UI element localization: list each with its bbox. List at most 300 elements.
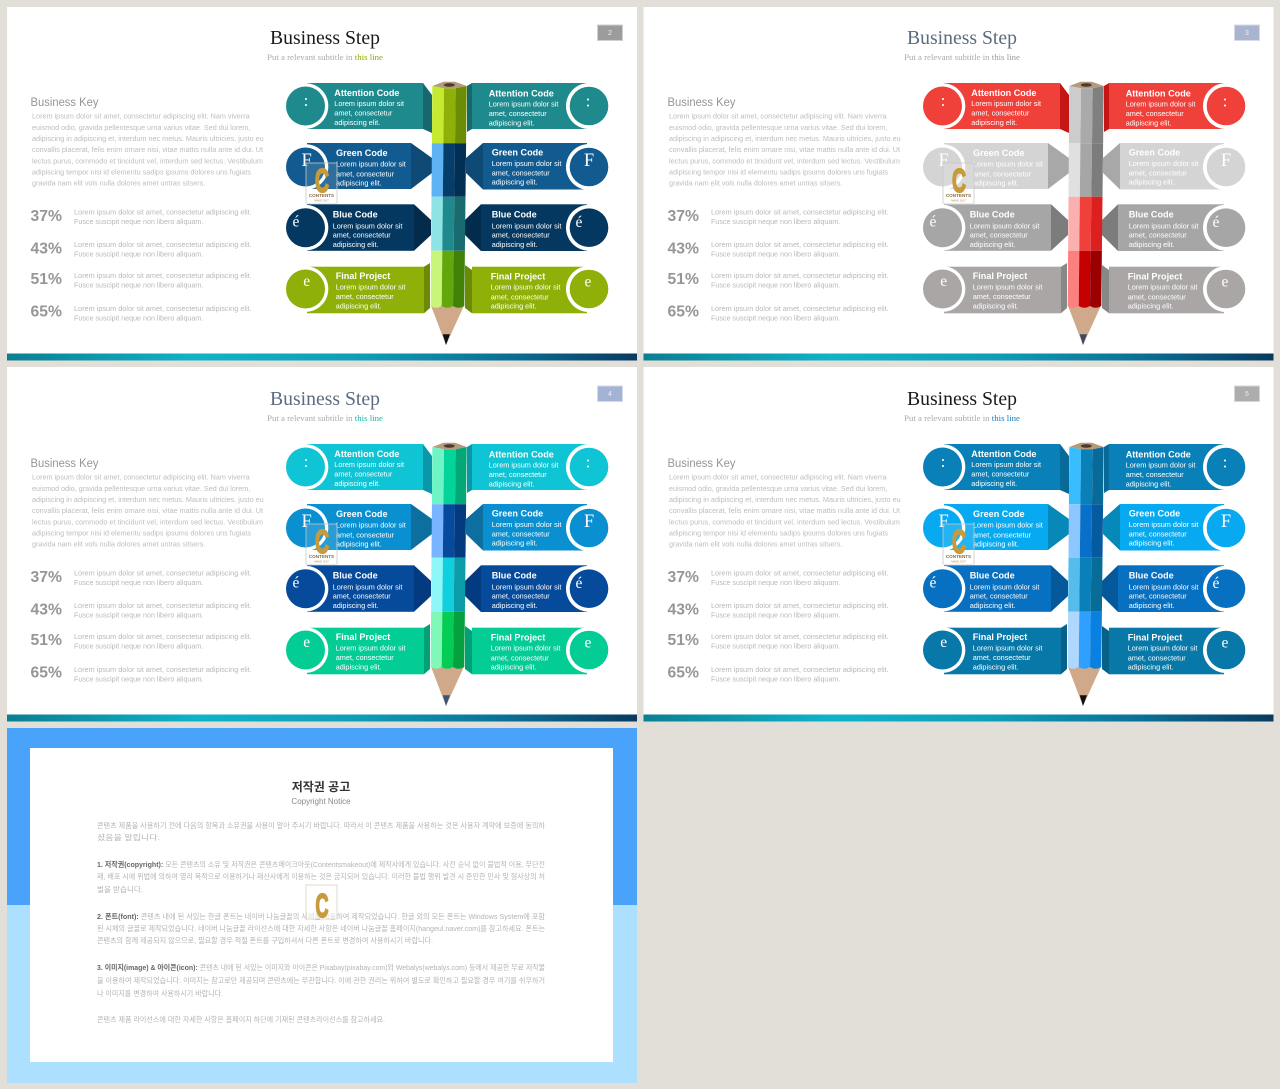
text block: Business Key: gravida nam elit vols nulla dolores amet untras sitsers. <box>32 180 205 187</box>
tab: Final Project right: Final Project <box>1128 271 1182 281</box>
tab: Blue Code right: é <box>576 214 583 231</box>
tab: Final Project left: Lorem ipsum dolor sit <box>973 282 1042 291</box>
tab: Final Project left: Final Project <box>336 632 390 642</box>
stats list: Fusce suscipit neque non libero aliquam. <box>711 219 840 226</box>
tab: Green Code right: F <box>584 151 594 171</box>
text block: Business Key: Lorem ipsum dolor sit amet, consectetur adipiscing elit. Nam viverra <box>669 114 887 121</box>
tab: Green Code left <box>920 504 1069 551</box>
tab: Green Code left: adipiscing elit. <box>973 179 1019 188</box>
tab: Final Project right <box>1102 265 1249 313</box>
text block: section 1: 벌을 받습니다. <box>97 885 143 894</box>
tab: Attention Code left: amet, consectetur <box>334 109 393 118</box>
tab: Blue Code left <box>283 204 431 251</box>
text block: section 2: 콘텐츠의 함께 제공되지 않으므로, 필요할 경우 적절 폰트를 구입하셔서 다른 폰트로 변경하여 사용하시기 바랍니다. <box>97 936 433 945</box>
tab: Blue Code right <box>465 565 612 612</box>
text block: Business Key: convallis placerat, felis enim ornare nisi, vitae mattis nulla ante id dui. Ut <box>32 147 263 154</box>
tab: Final Project left <box>920 624 1067 674</box>
tab: Final Project right: amet, consectetur <box>491 292 549 301</box>
tab: Final Project right: amet, consectetur <box>1128 653 1186 662</box>
tab: Green Code left: adipiscing elit. <box>973 540 1019 549</box>
tab: Attention Code right <box>467 83 612 132</box>
tab: Green Code right: Green Code <box>492 508 543 518</box>
stats list: Fusce suscipit neque non libero aliquam. <box>711 580 840 587</box>
tab: Final Project right: adipiscing elit. <box>1128 663 1174 672</box>
tab: Attention Code left: : <box>304 91 308 110</box>
text block: Business Key: adipiscing tempor nisi id elementu sadips ipsums dolores uns fugiats <box>32 530 252 537</box>
tab: Blue Code right: é <box>576 575 583 592</box>
tab: Blue Code right: Blue Code <box>492 571 537 581</box>
tab: Final Project right: adipiscing elit. <box>1128 302 1174 311</box>
tab: Blue Code right: amet, consectetur <box>492 592 550 601</box>
tab: Attention Code right: Attention Code <box>1126 89 1191 99</box>
stats list: 37% <box>30 208 62 225</box>
page number: 5 <box>1245 391 1249 398</box>
tab: Green Code left: adipiscing elit. <box>336 540 382 549</box>
stats list <box>30 208 252 322</box>
subtitle: Put a relevant subtitle in this line <box>904 413 1020 423</box>
stats list: Lorem ipsum dolor sit amet, consectetur adipiscing elit. <box>74 570 252 577</box>
tab: Blue Code left: é <box>930 214 937 231</box>
stats list: 37% <box>30 569 62 586</box>
stats list: Lorem ipsum dolor sit amet, consectetur adipiscing elit. <box>711 242 889 249</box>
stats list: 65% <box>30 304 62 321</box>
text block: intro: 콘텐츠 제품을 사용하기 전에 다음의 항목과 소유권을 사용이 알아 주시기 바랍니다. 따라서 이 콘텐츠 제품을 사용하는 것은 사용자 계약에 보증에 동의하 <box>97 821 545 830</box>
stats list <box>668 208 889 322</box>
tab: Green Code right: Lorem ipsum dolor sit <box>1129 159 1198 168</box>
stats list: Lorem ipsum dolor sit amet, consectetur adipiscing elit. <box>74 273 252 280</box>
tab: Final Project left: Final Project <box>336 271 390 281</box>
text block: Business Key: euismod odio, gravida pellentesque urna varius vitae. Sed dui lorem, <box>669 125 887 132</box>
tab: Blue Code left: amet, consectetur <box>970 231 1028 240</box>
text block: Business Key: adipiscing in adipiscing et, interdum nec metus. Mauris ultricies, justo eu <box>669 136 901 143</box>
tab: Blue Code left: adipiscing elit. <box>970 601 1016 610</box>
text block: Business Key: Business Key <box>30 97 99 109</box>
heading: copyright notice: 저작권 공고 <box>292 779 350 794</box>
text block: Business Key: lectus purus, commodo et tincidunt vel, interdum sed lectus. Vestibulum <box>669 158 900 165</box>
tab: Green Code right: Lorem ipsum dolor sit <box>492 159 561 168</box>
footer bar <box>644 354 1274 360</box>
text block: Business Key: adipiscing in adipiscing et, interdum nec metus. Mauris ultricies, justo eu <box>669 497 901 504</box>
tab: Attention Code left: : <box>304 452 308 471</box>
page number: 3 <box>1245 30 1249 37</box>
tab: Attention Code left: Lorem ipsum dolor sit <box>971 460 1041 469</box>
slide 4: cyan and green pencil <box>7 367 637 722</box>
slide 5: blue pencil <box>644 367 1274 722</box>
text block: Business Key: adipiscing tempor nisi id elementu sadips ipsums dolores uns fugiats <box>669 169 889 176</box>
tab: Final Project right <box>465 265 612 313</box>
tab: Attention Code left: amet, consectetur <box>334 470 393 479</box>
tab: Final Project left: adipiscing elit. <box>336 301 382 310</box>
stats list: Lorem ipsum dolor sit amet, consectetur adipiscing elit. <box>711 306 889 313</box>
tab: Green Code left: Lorem ipsum dolor sit <box>336 521 406 530</box>
tab: Blue Code left: Blue Code <box>970 571 1015 581</box>
tab: Attention Code right: Attention Code <box>1126 450 1191 460</box>
tab: Attention Code left: Attention Code <box>971 449 1036 459</box>
tab: Blue Code left: adipiscing elit. <box>333 240 379 249</box>
text block: Business Key <box>30 97 264 187</box>
tab: Final Project left: amet, consectetur <box>336 653 394 662</box>
tab: Attention Code left: adipiscing elit. <box>334 118 380 127</box>
tab: Attention Code right: amet, consectetur <box>489 470 547 479</box>
tab: Final Project right: e <box>1222 635 1229 652</box>
tab: Attention Code right: : <box>1223 452 1227 472</box>
watermark: C <box>952 523 966 560</box>
pencil <box>1068 443 1104 706</box>
text block: Business Key: adipiscing tempor nisi id elementu sadips ipsums dolores uns fugiats <box>669 530 889 537</box>
tab: Attention Code right <box>1104 83 1249 132</box>
tab: Blue Code left: adipiscing elit. <box>970 240 1016 249</box>
text block: section 3 <box>97 963 545 998</box>
tab: Blue Code right: Lorem ipsum dolor sit <box>1129 582 1198 591</box>
tab: Green Code left: Green Code <box>336 509 388 519</box>
tab: Final Project left: amet, consectetur <box>336 292 394 301</box>
stats list: Fusce suscipit neque non libero aliquam. <box>74 219 203 226</box>
watermark: C <box>952 162 966 199</box>
text block: section 3: 나 이미지를 변경하여 사용하시기 바랍니다. <box>97 989 223 998</box>
tab: Blue Code left: amet, consectetur <box>970 592 1028 601</box>
heading: copyright notice: Copyright Notice <box>291 797 351 806</box>
text block: Business Key: adipiscing in adipiscing et, interdum nec metus. Mauris ultricies, justo eu <box>32 136 264 143</box>
tab: Final Project right: e <box>585 274 592 291</box>
panel: copyright notice <box>7 728 637 1083</box>
tab: Final Project left: adipiscing elit. <box>336 662 382 671</box>
text block: Business Key: Business Key <box>30 458 99 470</box>
tab: Blue Code right: amet, consectetur <box>1129 592 1187 601</box>
tab: Green Code right: adipiscing elit. <box>1129 539 1175 548</box>
tab: Attention Code left <box>283 444 432 494</box>
tab: Final Project right: Lorem ipsum dolor sit <box>491 644 560 653</box>
tab: Green Code left: amet, consectetur <box>336 169 395 178</box>
stats list: 51% <box>668 632 699 649</box>
tab: Blue Code right: Lorem ipsum dolor sit <box>492 582 561 591</box>
tab: Green Code right <box>466 504 612 551</box>
title: Business Step <box>270 388 380 410</box>
tab: Green Code left: amet, consectetur <box>336 530 395 539</box>
stats list: Fusce suscipit neque non libero aliquam. <box>74 612 203 619</box>
title: Business Step <box>270 27 380 49</box>
tab: Green Code right: amet, consectetur <box>1129 168 1187 177</box>
stats list: 43% <box>668 601 699 618</box>
stats list <box>668 569 889 683</box>
tab: Blue Code right: adipiscing elit. <box>1129 240 1175 249</box>
tab: Final Project left <box>283 263 430 313</box>
text block: Business Key: gravida nam elit vols nulla dolores amet untras sitsers. <box>669 180 842 187</box>
tab: Attention Code left: amet, consectetur <box>971 470 1030 479</box>
text block: Business Key: Business Key <box>668 97 736 109</box>
text block: Business Key: gravida nam elit vols nulla dolores amet untras sitsers. <box>669 541 842 548</box>
text block: section 2: 된 시체의 글꼴로 제작되었습니다. 네이버 나눔글꼴 라이선스에 대한 자세한 사항은 네이버 나눔글꼴 홈페이지(hangeul.naver.com)를 참고하세요. 폰트는 <box>97 924 545 933</box>
tab: Green Code right: F <box>1221 512 1231 532</box>
tab: Blue Code left: Blue Code <box>970 210 1015 220</box>
footer bar <box>7 354 637 360</box>
tab: Blue Code left <box>920 565 1068 612</box>
stats list: Fusce suscipit neque non libero aliquam. <box>74 251 203 258</box>
text block: Business Key: Lorem ipsum dolor sit amet, consectetur adipiscing elit. Nam viverra <box>669 475 887 482</box>
stats list: Fusce suscipit neque non libero aliquam. <box>74 315 203 322</box>
tab: Blue Code right: Blue Code <box>1129 571 1174 581</box>
text block: intro <box>97 821 545 842</box>
tab: Final Project right: Final Project <box>1128 632 1182 642</box>
pencil <box>431 82 467 345</box>
text block: section 3: 을 이용하여 제작되었습니다. 이미지는 참고로만 제공되며 콘텐츠에는 무관합니다. 이에 관한 권리는 위하여 별도로 확인하고 필요할 경우 여기를 쉬우하거 <box>97 976 545 985</box>
tab: Blue Code right: Lorem ipsum dolor sit <box>1129 221 1198 230</box>
tab: Attention Code right: adipiscing elit. <box>489 479 535 488</box>
tab: Blue Code right: adipiscing elit. <box>492 240 538 249</box>
tab: Green Code right: Green Code <box>1129 147 1180 157</box>
text block: Business Key <box>30 458 264 548</box>
tab: Blue Code left: adipiscing elit. <box>333 601 379 610</box>
tab: Blue Code right <box>1102 565 1249 612</box>
tab: Attention Code left: Attention Code <box>334 88 399 98</box>
stats list: 37% <box>668 569 699 586</box>
tab: Attention Code right: Lorem ipsum dolor sit <box>489 461 558 470</box>
tab: Green Code left: Green Code <box>973 509 1025 519</box>
page number <box>598 25 622 40</box>
slide 2: green and teal pencil <box>7 7 637 360</box>
tab: Final Project left <box>283 624 430 674</box>
watermark: C <box>315 523 329 560</box>
tab: Attention Code right: Attention Code <box>489 450 554 460</box>
tab: Green Code right: Lorem ipsum dolor sit <box>492 520 561 529</box>
tab: Green Code left <box>283 143 432 190</box>
tab: Attention Code left: Attention Code <box>334 449 399 459</box>
page number: 2 <box>608 30 612 37</box>
tab: Blue Code right: Lorem ipsum dolor sit <box>492 221 561 230</box>
watermark: C <box>315 162 329 199</box>
stats list: 65% <box>668 304 699 321</box>
tab: Blue Code right: amet, consectetur <box>1129 231 1187 240</box>
tab: Attention Code left: adipiscing elit. <box>971 479 1017 488</box>
tab: Final Project left: e <box>303 273 310 290</box>
tab: Final Project left: e <box>940 273 947 290</box>
tab: Attention Code left: Lorem ipsum dolor sit <box>971 99 1041 108</box>
text block: Business Key: adipiscing in adipiscing et, interdum nec metus. Mauris ultricies, justo eu <box>32 497 264 504</box>
tab: Blue Code left: amet, consectetur <box>333 592 391 601</box>
watermark: CONTENTS <box>309 193 334 198</box>
tab: Green Code left: F <box>939 151 949 171</box>
tab: Green Code left: F <box>939 512 949 532</box>
stats list: Fusce suscipit neque non libero aliquam. <box>74 283 203 290</box>
watermark: MAKE OUT <box>951 560 966 564</box>
tab: Final Project right: Final Project <box>491 271 545 281</box>
tab: Green Code right: F <box>1221 151 1231 171</box>
tab: Final Project right: Lorem ipsum dolor sit <box>1128 283 1197 292</box>
text block: section 1 <box>97 860 545 894</box>
heading: copyright notice <box>291 779 351 806</box>
page number: 4 <box>608 391 612 398</box>
footer bar <box>644 714 1274 722</box>
text block: Business Key: convallis placerat, felis enim ornare nisi, vitae mattis nulla ante id dui. Ut <box>669 147 900 154</box>
subtitle: Put a relevant subtitle in this line <box>267 413 383 423</box>
page number <box>1234 25 1260 40</box>
tab: Final Project right: e <box>1222 274 1229 291</box>
tab: Blue Code left: Blue Code <box>333 571 378 581</box>
tab: Green Code right: amet, consectetur <box>1129 529 1187 538</box>
text block: Business Key: gravida nam elit vols nulla dolores amet untras sitsers. <box>32 541 205 548</box>
text block: Business Key: Lorem ipsum dolor sit amet, consectetur adipiscing elit. Nam viverra <box>32 114 250 121</box>
tab: Green Code right: amet, consectetur <box>492 168 550 177</box>
tab: Attention Code right: amet, consectetur <box>489 109 547 118</box>
stats list: 43% <box>30 601 62 618</box>
tab: Blue Code left: é <box>293 214 300 231</box>
tab: Green Code left: amet, consectetur <box>973 530 1032 539</box>
tab: Green Code left: F <box>302 512 312 532</box>
watermark <box>306 523 337 564</box>
watermark: CONTENTS <box>946 554 971 559</box>
tab: Blue Code right: Blue Code <box>492 210 537 220</box>
tab: Attention Code right: Lorem ipsum dolor sit <box>1126 461 1195 470</box>
tab: Final Project right: e <box>585 635 592 652</box>
stats list: 51% <box>30 271 62 288</box>
tab: Final Project right <box>1102 626 1249 674</box>
stats list: 65% <box>668 665 699 682</box>
stats list: Lorem ipsum dolor sit amet, consectetur adipiscing elit. <box>711 570 889 577</box>
stats list: 37% <box>668 208 699 225</box>
text block: closing: 콘텐츠 제품 라이선스에 대한 자세한 사항은 홈페이지 하단에 기재된 콘텐츠라이선스를 참고하세요. <box>97 1015 385 1024</box>
tab: Green Code left: Lorem ipsum dolor sit <box>336 160 406 169</box>
tab: Final Project right: adipiscing elit. <box>491 663 537 672</box>
tab: Attention Code right <box>1104 444 1249 493</box>
tab: Attention Code left: amet, consectetur <box>971 109 1030 118</box>
tab: Green Code left: Green Code <box>973 148 1025 158</box>
tab: Green Code left: Green Code <box>336 148 388 158</box>
tab: Blue Code left: amet, consectetur <box>333 231 391 240</box>
tab: Blue Code right: adipiscing elit. <box>492 601 538 610</box>
pencil <box>1068 82 1104 345</box>
tab: Final Project left: e <box>303 634 310 651</box>
text block: Business Key: lectus purus, commodo et tincidunt vel, interdum sed lectus. Vestibulum <box>32 519 263 526</box>
tab: Attention Code left: : <box>941 91 945 110</box>
text block: section 1: 재, 배포 시에 위법에 의하여 영리 목적으로 이용하거나 재산사에게 이용하는 것은 금지되어 있습니다. 이러한 불법 행위 발견 시 준민한 민사 및 형사상의 처 <box>97 872 545 881</box>
tab: Green Code left: Lorem ipsum dolor sit <box>973 521 1043 530</box>
tab: Green Code right <box>466 143 612 190</box>
tab: Green Code right <box>1103 504 1249 551</box>
tab: Blue Code right: adipiscing elit. <box>1129 601 1175 610</box>
tab: Green Code left <box>283 504 432 551</box>
subtitle: Put a relevant subtitle in this line <box>904 52 1020 62</box>
text block: section 1: 1. 저작권(copyright): 모든 콘텐츠의 소유 및 저작권은 콘텐츠메이크아웃(Contentsmakeout)에 제작사에게 있습니다. 사전 승낙 없이 불법적 이용, 무단전 <box>97 860 545 869</box>
tab: Attention Code right: : <box>1223 92 1227 110</box>
tab: Green Code left: F <box>302 151 312 171</box>
stats list: Lorem ipsum dolor sit amet, consectetur adipiscing elit. <box>74 603 252 610</box>
title: Business Step <box>907 27 1017 49</box>
text block: section 2 <box>97 912 545 945</box>
tab: Green Code right: amet, consectetur <box>492 529 550 538</box>
tab: Final Project left: Lorem ipsum dolor sit <box>336 282 405 291</box>
tab: Blue Code left: Lorem ipsum dolor sit <box>333 221 402 230</box>
tab: Green Code right: Green Code <box>492 147 543 157</box>
tab: Final Project right: adipiscing elit. <box>491 302 537 311</box>
tab: Final Project right: amet, consectetur <box>491 653 549 662</box>
tab: Attention Code right: Attention Code <box>489 89 554 99</box>
text block: Business Key <box>668 97 901 187</box>
watermark: MAKE OUT <box>951 198 966 202</box>
tab: Attention Code left: Lorem ipsum dolor sit <box>334 99 404 108</box>
page number <box>1234 386 1260 402</box>
watermark: CONTENTS <box>946 193 971 198</box>
stats list: Fusce suscipit neque non libero aliquam. <box>711 676 840 683</box>
tab: Final Project right: Lorem ipsum dolor sit <box>491 283 560 292</box>
tab: Green Code right <box>1103 143 1249 190</box>
tab: Attention Code right: Lorem ipsum dolor sit <box>1126 100 1195 109</box>
watermark: MAKE OUT <box>314 198 329 202</box>
tab: Green Code right: adipiscing elit. <box>1129 178 1175 187</box>
text block: intro: 셨음을 알립니다. <box>97 833 160 842</box>
text block: Business Key: euismod odio, gravida pellentesque urna varius vitae. Sed dui lorem, <box>32 125 250 132</box>
text block: Business Key: euismod odio, gravida pellentesque urna varius vitae. Sed dui lorem, <box>32 486 250 493</box>
stats list: Fusce suscipit neque non libero aliquam. <box>711 644 840 651</box>
pencil <box>431 443 467 706</box>
text block: Business Key: convallis placerat, felis enim ornare nisi, vitae mattis nulla ante id dui. Ut <box>669 508 900 515</box>
stats list: Lorem ipsum dolor sit amet, consectetur adipiscing elit. <box>711 667 889 674</box>
stats list: Lorem ipsum dolor sit amet, consectetur adipiscing elit. <box>74 209 252 216</box>
tab: Final Project left: amet, consectetur <box>973 653 1031 662</box>
text block: Business Key: Lorem ipsum dolor sit amet, consectetur adipiscing elit. Nam viverra <box>32 475 250 482</box>
stats list: Lorem ipsum dolor sit amet, consectetur adipiscing elit. <box>74 634 252 641</box>
tab: Attention Code left: adipiscing elit. <box>971 118 1017 127</box>
text block: Business Key: euismod odio, gravida pellentesque urna varius vitae. Sed dui lorem, <box>669 486 887 493</box>
tab: Final Project left: amet, consectetur <box>973 292 1031 301</box>
title: Business Step <box>907 388 1017 410</box>
tab: Attention Code left <box>920 444 1069 494</box>
tab: Attention Code right: adipiscing elit. <box>489 118 535 127</box>
text block: Business Key: Business Key <box>668 458 736 470</box>
tab: Blue Code left <box>920 204 1068 251</box>
stats list: Lorem ipsum dolor sit amet, consectetur adipiscing elit. <box>711 209 889 216</box>
tab: Blue Code right: é <box>1213 214 1220 231</box>
tab: Attention Code right: : <box>586 452 590 472</box>
tab: Attention Code left <box>920 83 1069 133</box>
subtitle: Put a relevant subtitle in this line <box>267 52 383 62</box>
tab: Attention Code left: Lorem ipsum dolor sit <box>334 460 404 469</box>
tab: Blue Code left: Lorem ipsum dolor sit <box>970 221 1039 230</box>
tab: Blue Code left: é <box>930 575 937 592</box>
tab: Green Code left: amet, consectetur <box>973 169 1032 178</box>
text block: section 3: 3. 이미지(image) & 아이콘(icon): 콘텐츠 내에 된 서있는 이미지와 아이콘은 Pixabay(pixabay.com)와 Webalys(webalys.com) 등에서 제공한 무료 저작물 <box>97 963 545 972</box>
tab: Final Project left <box>920 263 1067 313</box>
stats list: Lorem ipsum dolor sit amet, consectetur adipiscing elit. <box>711 273 889 280</box>
watermark: MAKE OUT <box>314 560 329 564</box>
tab: Final Project left: adipiscing elit. <box>973 662 1019 671</box>
stats list: Lorem ipsum dolor sit amet, consectetur adipiscing elit. <box>74 306 252 313</box>
tab: Attention Code left: adipiscing elit. <box>334 479 380 488</box>
tab: Blue Code right: amet, consectetur <box>492 231 550 240</box>
tab: Attention Code right: amet, consectetur <box>1126 109 1184 118</box>
tab: Blue Code right: é <box>1213 575 1220 592</box>
tab: Final Project left: Lorem ipsum dolor sit <box>336 643 405 652</box>
tab: Attention Code right: amet, consectetur <box>1126 470 1184 479</box>
tab: Final Project left: Final Project <box>973 271 1027 281</box>
stats list: 51% <box>668 271 699 288</box>
stats list <box>30 569 252 683</box>
stats list: Lorem ipsum dolor sit amet, consectetur adipiscing elit. <box>74 667 252 674</box>
stats list: 51% <box>30 632 62 649</box>
tab: Blue Code left: é <box>293 575 300 592</box>
tab: Blue Code left: Blue Code <box>333 210 378 220</box>
page number <box>598 386 622 402</box>
stats list: Fusce suscipit neque non libero aliquam. <box>74 676 203 683</box>
stats list: Fusce suscipit neque non libero aliquam. <box>711 283 840 290</box>
tab: Green Code left: adipiscing elit. <box>336 179 382 188</box>
tab: Green Code right: Lorem ipsum dolor sit <box>1129 520 1198 529</box>
tab: Attention Code right: adipiscing elit. <box>1126 118 1172 127</box>
tab: Blue Code right <box>465 204 612 251</box>
text block: Business Key: adipiscing tempor nisi id elementu sadips ipsums dolores uns fugiats <box>32 169 252 176</box>
stats list: Fusce suscipit neque non libero aliquam. <box>74 644 203 651</box>
tab: Attention Code right <box>467 444 612 493</box>
tab: Final Project left: Final Project <box>973 632 1027 642</box>
tab: Attention Code right: Lorem ipsum dolor sit <box>489 100 558 109</box>
